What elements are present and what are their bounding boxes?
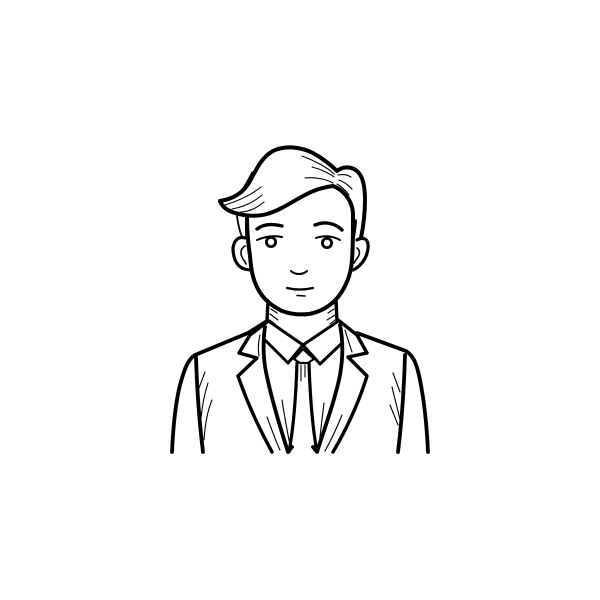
face outline (247, 216, 353, 314)
left eyebrow (257, 225, 282, 229)
right lapel (319, 320, 367, 452)
jacket right shoulder and sleeve (357, 333, 428, 452)
left ear (233, 238, 252, 270)
jacket left shoulder and sleeve (172, 321, 267, 452)
right ear (352, 238, 368, 270)
neck (267, 301, 337, 325)
mouth (287, 288, 313, 296)
left eye (257, 236, 282, 247)
right eyebrow (315, 223, 342, 230)
tie (289, 349, 317, 452)
right shirt front edge (313, 325, 342, 452)
shirt collar (265, 320, 342, 364)
hair (220, 147, 365, 238)
nose (291, 271, 307, 274)
left shirt front edge (264, 327, 292, 452)
left lapel (238, 322, 290, 452)
right eye (316, 236, 340, 248)
